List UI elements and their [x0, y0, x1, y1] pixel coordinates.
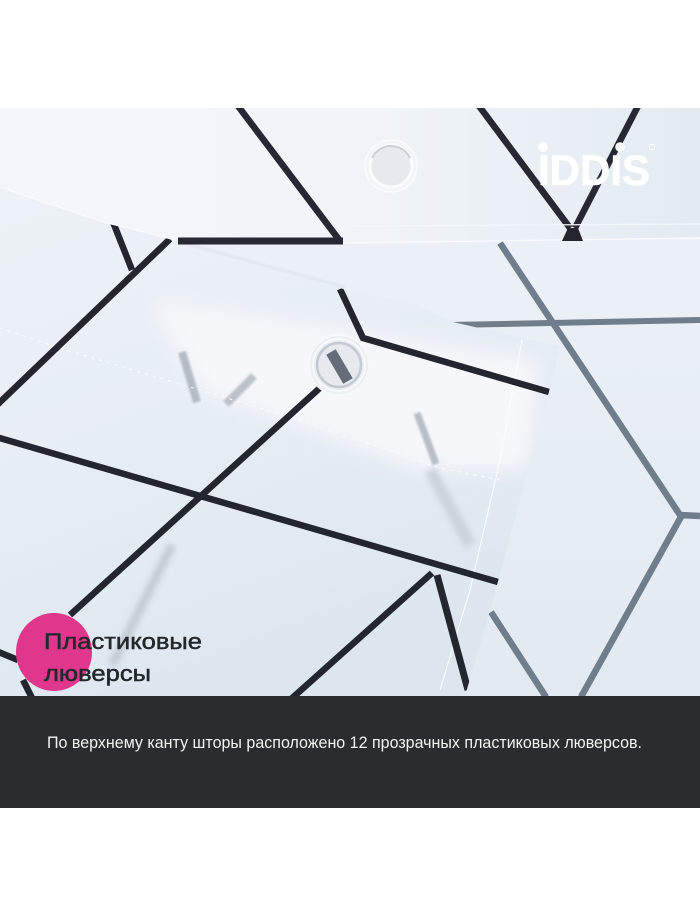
infographic canvas — [0, 108, 700, 808]
shadow and see-through lines on front layer — [0, 222, 549, 700]
IDDIS logo: IDDIS — [538, 147, 650, 195]
front curtain layer — [0, 187, 560, 700]
heading — [44, 629, 202, 686]
front layer black pattern lines — [0, 222, 549, 700]
curtain photo — [0, 106, 700, 700]
dark caption band — [0, 696, 700, 808]
top hem layer — [0, 106, 700, 287]
heading: Пластиковые — [44, 629, 202, 654]
heading: люверсы — [44, 661, 151, 686]
caption text: По верхнему канту шторы расположено 12 прозрачных пластиковых люверсов. — [47, 734, 642, 752]
back curtain layer — [194, 238, 700, 696]
top hem black lines — [178, 106, 638, 241]
hem bowtie mark — [562, 228, 583, 241]
grommet: front — [309, 335, 369, 395]
grommet: top — [365, 140, 417, 192]
pink circle accent — [16, 613, 92, 691]
stitching lines — [0, 328, 500, 480]
back layer grey pattern lines — [450, 243, 700, 697]
